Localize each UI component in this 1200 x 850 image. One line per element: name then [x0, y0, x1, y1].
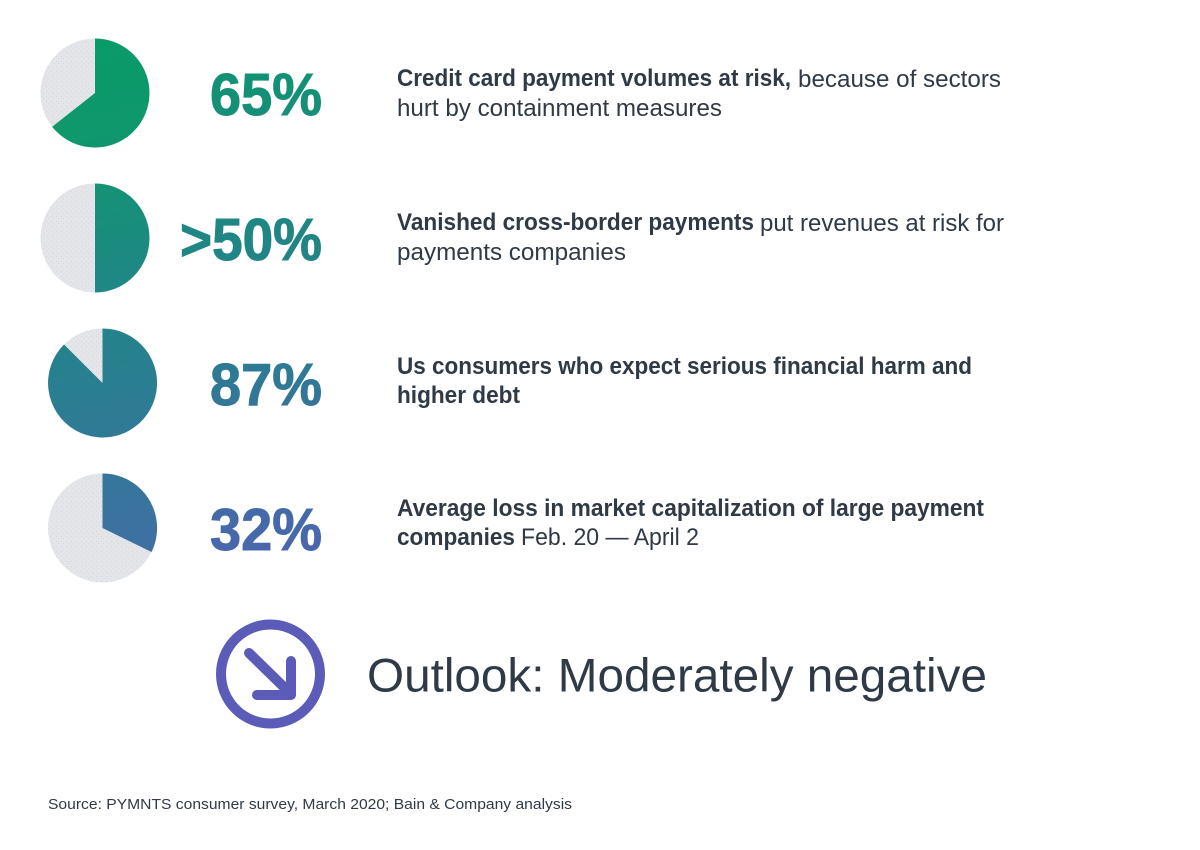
pie chart: 32% [48, 473, 157, 582]
stat: 87%: 87% [210, 352, 322, 418]
source note: Source: PYMNTS consumer survey, March 2020; Bain & Company analysis [48, 796, 572, 813]
description: market capitalization: Feb. 20 — April 2 [521, 524, 699, 551]
pie chart: 65% [40, 38, 150, 148]
description: cross-border payments: Vanished cross-border payments [397, 209, 754, 236]
description: US consumers: Us consumers who expect serious financial harm and [397, 353, 972, 380]
outlook [221, 624, 987, 724]
description: credit card payment volumes [397, 65, 1001, 122]
row: credit card payment volumes [40, 38, 1001, 148]
pie chart: 50% [40, 184, 150, 292]
icon: down-right arrow in circle [221, 624, 320, 724]
stat: 65%: 65% [210, 62, 322, 128]
stat: >50%: >50% [180, 207, 322, 273]
description: cross-border payments: put revenues at risk for [760, 210, 1004, 237]
outlook label: Outlook: Moderately negative [367, 648, 987, 702]
description: market capitalization: Average loss in market capitalization of large payment [397, 495, 984, 522]
description: cross-border payments [397, 209, 1004, 266]
description: market capitalization [397, 495, 984, 551]
description: US consumers [397, 353, 972, 409]
pie chart: 87% [48, 328, 157, 438]
stat: 32%: 32% [210, 497, 322, 563]
row: market capitalization [48, 473, 984, 582]
description: credit card payment volumes: Credit card payment volumes at risk, [397, 65, 791, 92]
description: credit card payment volumes: because of sectors [798, 66, 1001, 93]
description: credit card payment volumes: hurt by containment measures [397, 95, 722, 122]
description: cross-border payments: payments companies [397, 239, 626, 266]
row: US consumers [48, 328, 972, 438]
description: US consumers: higher debt [397, 382, 520, 409]
description: market capitalization: companies [397, 524, 515, 551]
row: cross-border payments [40, 184, 1004, 292]
